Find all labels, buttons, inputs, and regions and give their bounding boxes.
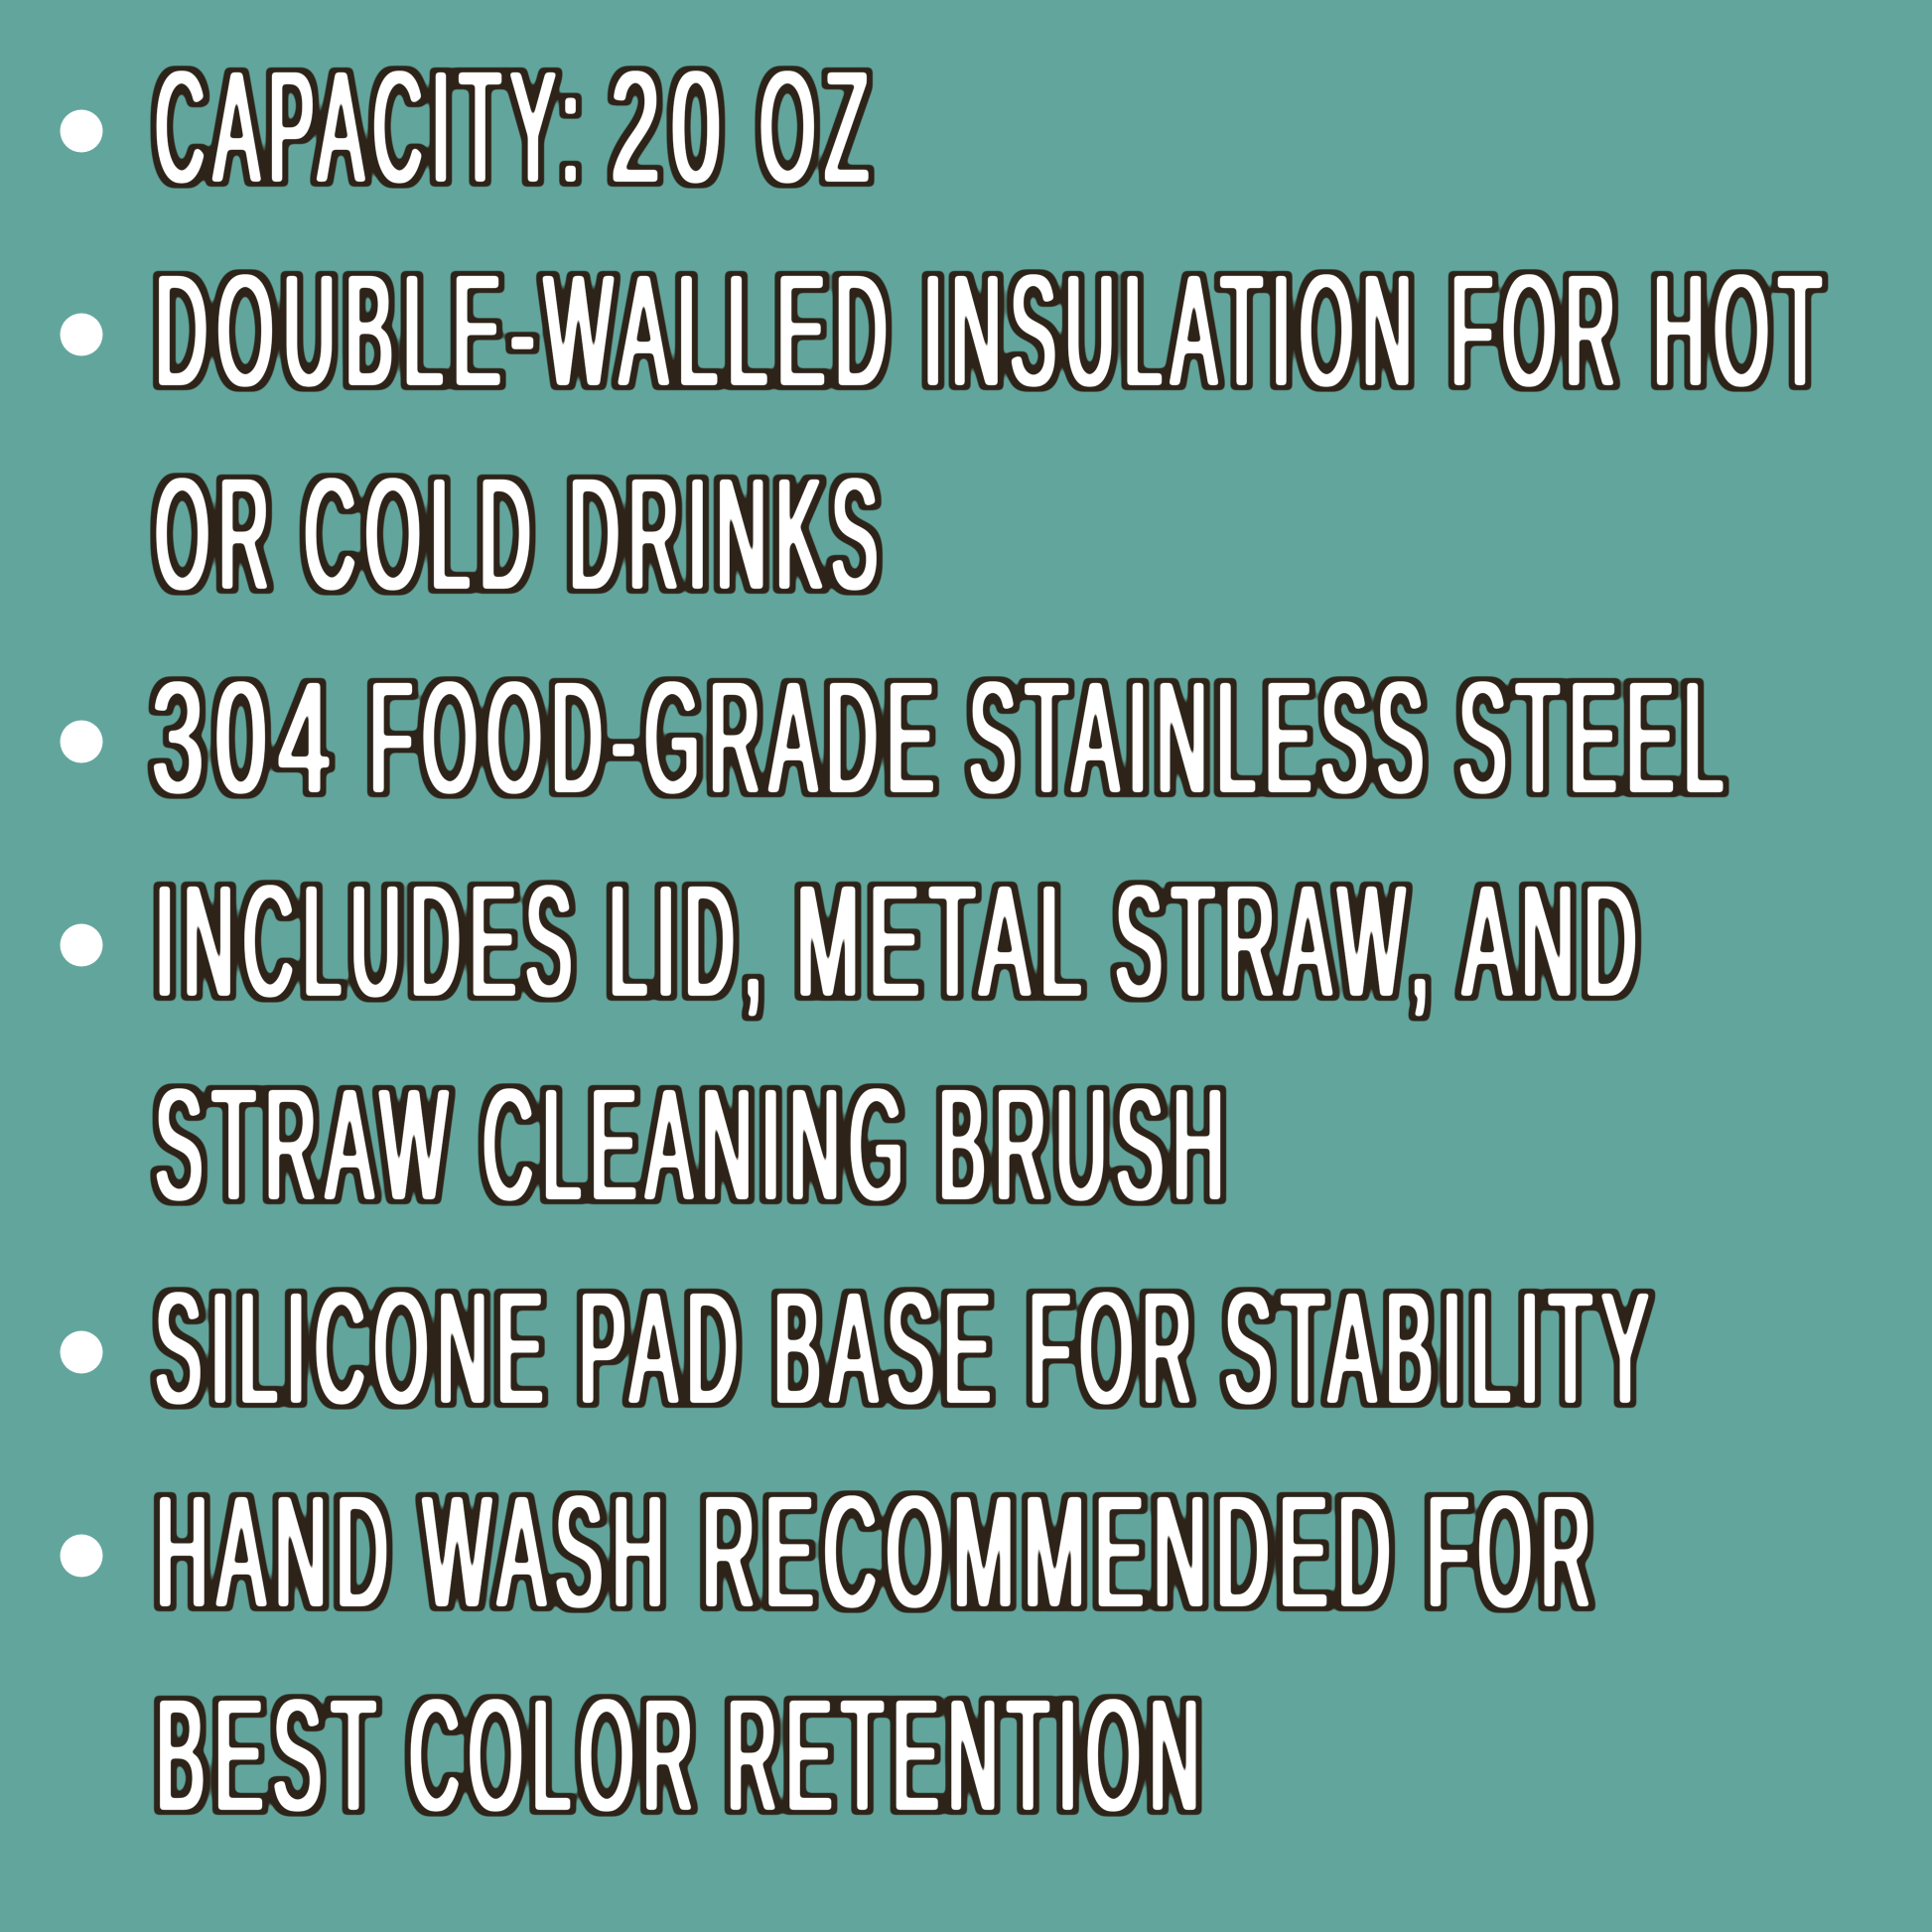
text: includes line 1: STRAW, <box>1115 852 1439 1030</box>
bullet 2 <box>60 314 103 355</box>
panel: feature list: DRINKS <box>569 445 887 622</box>
text: includes line 1: METAL <box>796 852 1091 1030</box>
text: hand wash line 2 <box>156 1666 1208 1844</box>
bullet 5 <box>60 1330 103 1374</box>
text: hand wash line 2: BEST <box>156 1666 385 1844</box>
text: includes line 1: LID, <box>609 852 771 1030</box>
text: includes line 2: CLEANING <box>483 1055 912 1233</box>
text: hand wash line 2: COLOR <box>409 1666 702 1844</box>
text: hand wash line 1 <box>156 1462 1599 1640</box>
text: hand wash line 1: HAND <box>156 1462 397 1640</box>
text: stainless steel: FOOD-GRADE <box>369 648 943 826</box>
text: double-walled insulation line 1: FOR <box>1450 241 1624 419</box>
text: capacity: CAPACITY: <box>155 38 589 215</box>
text: includes line 1: INCLUDES <box>155 852 581 1030</box>
panel: feature list: FOR <box>1427 1462 1599 1640</box>
text: capacity: 20 <box>611 38 732 215</box>
text: silicone pad: SILICONE <box>155 1259 552 1437</box>
text: stainless steel: 304 <box>152 648 342 826</box>
panel: feature list: OZ <box>759 38 878 215</box>
text: silicone pad: BASE <box>773 1259 1000 1437</box>
text: includes line 2 <box>155 1055 1233 1233</box>
panel: feature list: RETENTION <box>727 1666 1208 1844</box>
bullet 3 <box>60 721 103 762</box>
bullet 1 <box>60 109 103 153</box>
text: double-walled insulation line 2: OR <box>155 445 278 622</box>
text: silicone pad <box>155 1259 1658 1437</box>
bullet 6 <box>60 1535 103 1577</box>
text: hand wash line 1: WASH <box>423 1462 673 1640</box>
text: silicone pad: FOR <box>1029 1259 1200 1437</box>
text: includes line 2: STRAW <box>155 1055 457 1233</box>
bullet 4 <box>60 923 103 967</box>
text: double-walled insulation line 1: DOUBLE-WALLED <box>155 241 897 419</box>
panel: feature list: AND <box>1462 852 1646 1030</box>
text: includes line 1 <box>155 852 1646 1030</box>
text: double-walled insulation line 2: COLD <box>304 445 540 622</box>
panel: feature list: BRUSH <box>938 1055 1233 1233</box>
text: silicone pad: PAD <box>579 1259 747 1437</box>
